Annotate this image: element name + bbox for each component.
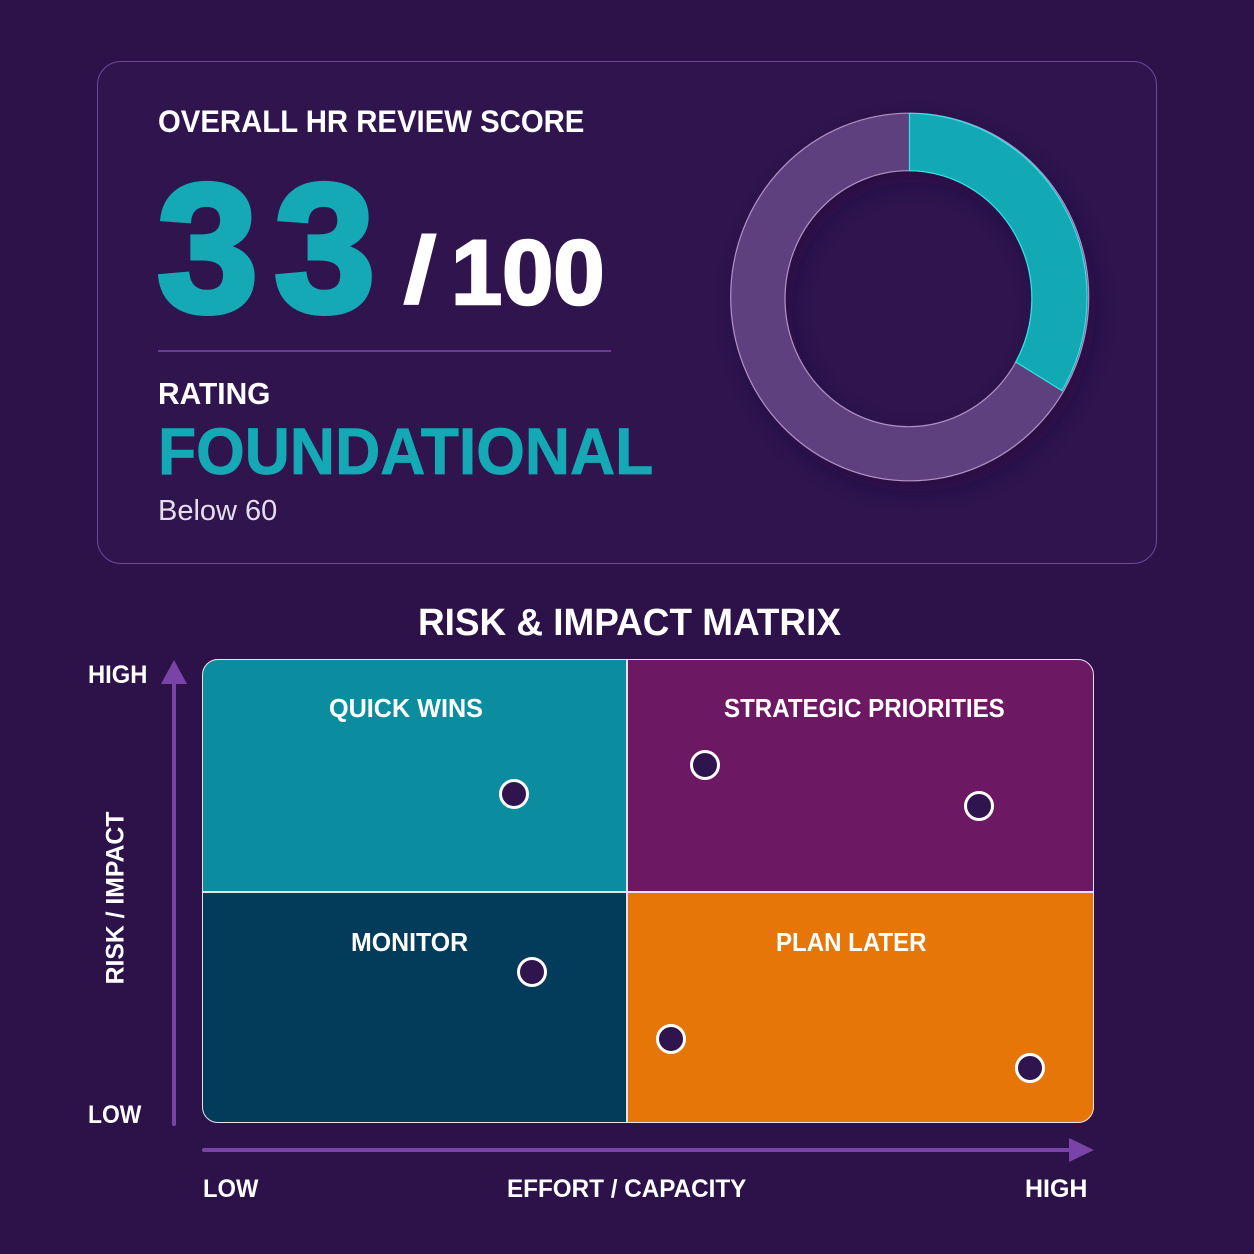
donut score segment — [910, 113, 1087, 391]
divider line — [158, 350, 611, 352]
rating label: RATING — [158, 376, 270, 411]
score value 33: 33 — [157, 146, 391, 350]
score slash: / — [402, 217, 438, 324]
rating value: FOUNDATIONAL — [158, 414, 653, 488]
heading: overall HR review score: OVERALL HR REVIEW SCORE — [158, 103, 584, 139]
label: strategic priorities: STRATEGIC PRIORITIES — [724, 693, 1005, 723]
quadrant: plan later — [626, 892, 1094, 1123]
x axis high label: HIGH — [1025, 1175, 1087, 1203]
rating threshold: Below 60 — [158, 495, 277, 527]
donut remainder — [731, 113, 1089, 481]
score denominator: 100 — [451, 222, 604, 324]
y axis low label: LOW — [88, 1101, 141, 1129]
quadrant: monitor — [202, 892, 626, 1123]
panel: overall score — [97, 61, 1156, 564]
y axis high label: HIGH — [88, 661, 147, 689]
matrix — [202, 659, 1094, 1123]
x axis low label: LOW — [203, 1175, 258, 1203]
quadrant: quick wins — [202, 659, 626, 892]
label: quick wins: QUICK WINS — [329, 693, 483, 723]
quadrant: strategic priorities — [626, 659, 1094, 892]
matrix title: RISK & IMPACT MATRIX — [418, 602, 841, 644]
y axis title: RISK / IMPACT — [102, 812, 130, 984]
x axis title: EFFORT / CAPACITY — [507, 1175, 746, 1203]
label: plan later: PLAN LATER — [776, 927, 927, 957]
x axis arrow — [202, 1138, 1094, 1162]
donut chart — [730, 112, 1096, 492]
label: monitor: MONITOR — [351, 927, 468, 957]
y axis arrow — [161, 660, 187, 1126]
